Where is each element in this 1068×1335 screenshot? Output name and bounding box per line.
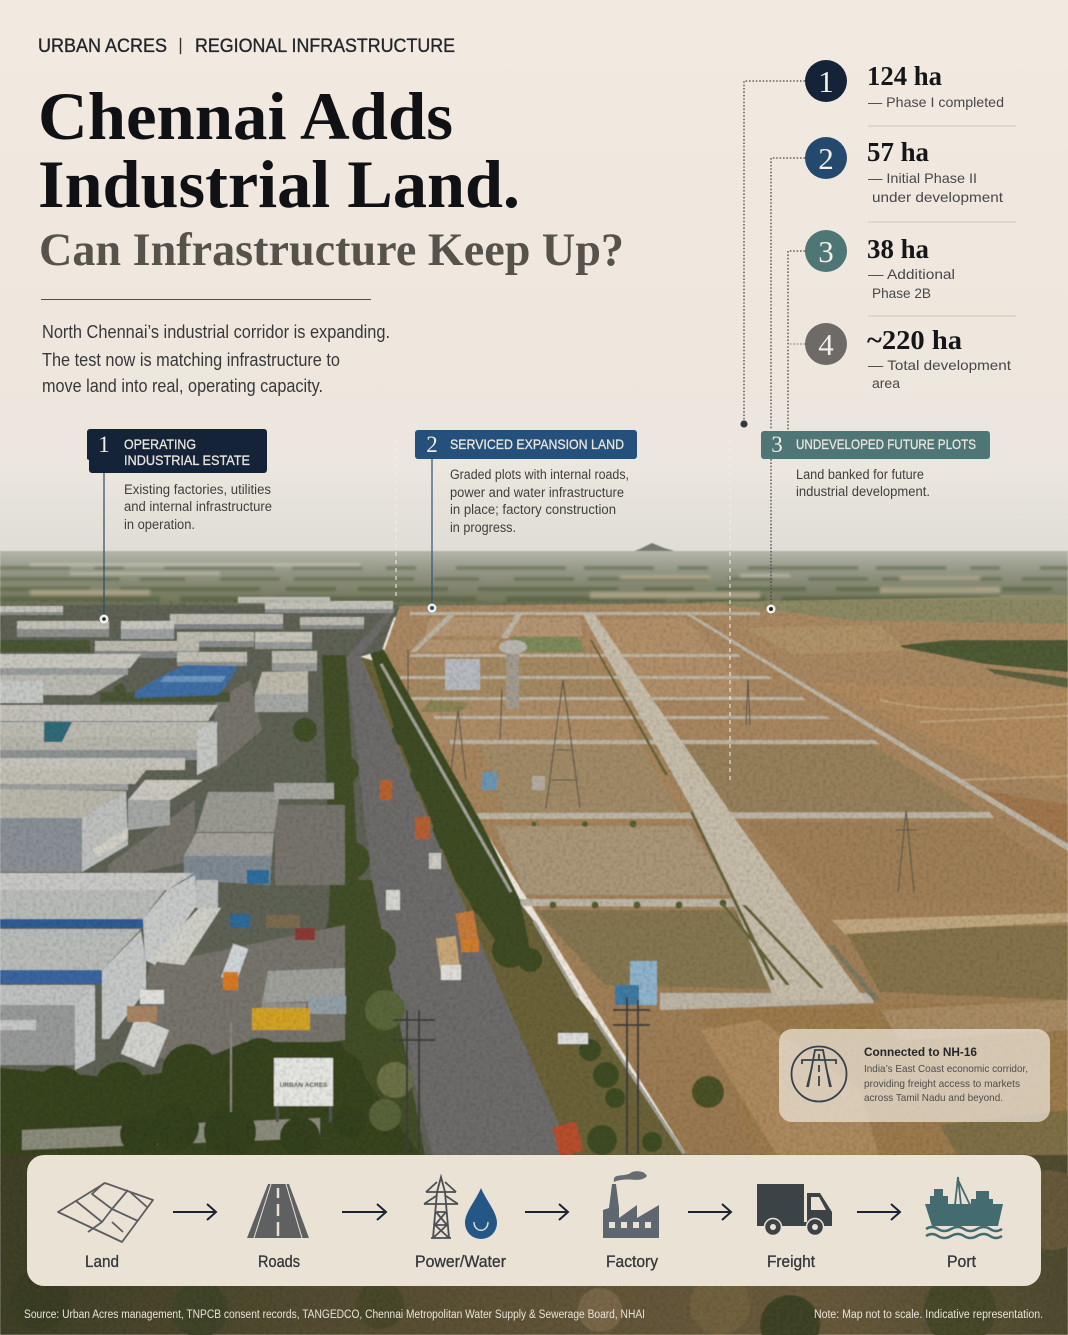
icon: highway [792, 1046, 846, 1102]
icon: cargo ship [925, 1177, 1003, 1238]
water tower [499, 640, 527, 709]
title [38, 78, 520, 222]
intro paragraph: move land into real, operating capacity. [42, 376, 323, 396]
boundary wall [22, 1118, 320, 1150]
upper right warehouse [255, 671, 308, 712]
graded plots [410, 618, 1068, 990]
stat: 57 ha [805, 137, 1003, 205]
description: and internal infrastructure [124, 499, 272, 514]
description: Land banked for future [796, 467, 924, 482]
description [868, 170, 1003, 205]
trucks and vehicles [121, 780, 588, 1156]
long warehouse rows [0, 705, 218, 830]
card text [864, 1063, 1028, 1104]
access road [346, 607, 572, 1155]
saplings along plot roads [532, 820, 726, 908]
description [124, 482, 272, 532]
description [868, 266, 955, 301]
divider [868, 222, 1016, 223]
badge [87, 429, 267, 473]
card [779, 1029, 1050, 1122]
card text: across Tamil Nadu and beyond. [864, 1092, 1003, 1104]
icon: truck [757, 1184, 832, 1236]
pylons [408, 650, 917, 892]
perimeter wall [381, 664, 684, 1154]
title: Chennai Adds [38, 78, 453, 154]
small service huts [482, 772, 657, 1005]
roadside trees [293, 655, 425, 1155]
description [796, 467, 930, 499]
plot access roads [400, 612, 1068, 1010]
number circle [805, 323, 847, 365]
card text: India’s East Coast economic corridor, [864, 1063, 1028, 1075]
blue roofed shed [135, 665, 238, 698]
centre warehouse [184, 783, 334, 885]
number circle [805, 137, 847, 179]
label: Freight: Freight [767, 1253, 815, 1271]
map marker [766, 604, 776, 614]
tree line beside fence [366, 608, 724, 1155]
circle numeral: 3 [818, 234, 834, 269]
description [868, 357, 1011, 391]
brand kicker: URBAN ACRES [38, 35, 167, 57]
photographic texture [0, 600, 1068, 1335]
map marker [100, 614, 108, 624]
circle numeral: 1 [818, 64, 834, 99]
arrow [342, 1204, 386, 1220]
arrow [688, 1204, 731, 1220]
section kicker: REGIONAL INFRASTRUCTURE [195, 35, 455, 57]
badge text: SERVICED EXPANSION LAND [450, 436, 624, 452]
description: Phase 2B [872, 285, 931, 301]
median planting [590, 640, 880, 1000]
description: under development [872, 189, 1003, 205]
icon: power pylon [424, 1177, 458, 1238]
arrow [173, 1204, 216, 1220]
foreground warehouse two [0, 929, 146, 1039]
badge number: 1 [98, 432, 110, 457]
callout: undeveloped future plots [761, 431, 990, 614]
small white building [0, 681, 43, 703]
intro paragraph [42, 322, 390, 396]
foreground warehouse one [0, 873, 221, 965]
billboard: URBAN ACRES [280, 1082, 328, 1089]
badge text: OPERATING [124, 436, 196, 452]
label: Factory: Factory [606, 1253, 659, 1271]
billboard [274, 1058, 333, 1122]
separator [180, 38, 181, 54]
number circle [805, 60, 847, 102]
callout: connected to NH-16 [779, 1029, 1050, 1122]
icon: factory [603, 1171, 659, 1238]
main concrete spine road [583, 615, 866, 1001]
badge text: UNDEVELOPED FUTURE PLOTS [796, 436, 976, 452]
dashed zone dividers [396, 440, 730, 780]
icon: road [247, 1184, 309, 1238]
estate base ground [0, 605, 440, 1155]
card heading: Connected to NH-16 [864, 1045, 977, 1059]
arrow [857, 1204, 900, 1220]
panel background [27, 1155, 1041, 1286]
description: — Additional [868, 266, 955, 282]
badge text [124, 436, 250, 468]
horizon fields and tree bands [0, 563, 1068, 600]
stat: 38 ha [805, 230, 955, 301]
badge number: 3 [771, 432, 783, 457]
callout: operating industrial estate [87, 429, 272, 624]
value: 57 ha [867, 137, 929, 167]
panel: land to port value chain [27, 1155, 1041, 1286]
value: ~220 ha [867, 325, 963, 355]
lower foreground scrub [0, 1155, 1068, 1335]
label: Power/Water: Power/Water [415, 1253, 506, 1271]
value: 124 ha [867, 61, 942, 91]
badge [415, 430, 637, 459]
yards [108, 680, 345, 1060]
distant hill [620, 543, 692, 556]
aerial photograph of the industrial corridor [0, 543, 1068, 1335]
serviced and undeveloped land [380, 600, 1068, 1160]
description: industrial development. [796, 484, 930, 499]
tree clumps between far warehouses [0, 640, 230, 702]
connector end dot [740, 420, 748, 428]
mid left warehouse [0, 789, 128, 872]
label: Land: Land [85, 1253, 119, 1271]
description: — Total development [868, 357, 1011, 373]
icon: water drop [465, 1188, 497, 1239]
sky background [0, 0, 1068, 552]
hazy horizon band [0, 551, 1068, 617]
description: Existing factories, utilities [124, 482, 271, 497]
label: Port: Port [947, 1253, 976, 1271]
stat: 124 ha [805, 60, 1004, 110]
description: — Initial Phase II [868, 170, 977, 186]
header line [38, 35, 455, 57]
description: in place; factory construction [450, 502, 616, 517]
utility poles [231, 997, 650, 1154]
stat: ~220 ha [805, 323, 1011, 391]
description: Graded plots with internal roads, [450, 467, 629, 482]
badge text: INDUSTRIAL ESTATE [124, 452, 250, 468]
roadside verge between road and fence [361, 657, 690, 1160]
icon: land parcels [58, 1183, 153, 1242]
foreground warehouse three [0, 985, 95, 1070]
number circle [805, 230, 847, 272]
circle numeral: 4 [818, 327, 834, 362]
callout: serviced expansion land [415, 430, 637, 612]
far warehouses [0, 597, 393, 695]
badge [761, 431, 990, 459]
intro paragraph: North Chennai’s industrial corridor is expanding. [42, 322, 390, 342]
badge number: 2 [426, 432, 438, 457]
stat connector lines [744, 81, 805, 604]
leader line [103, 473, 105, 616]
title: Industrial Land. [38, 146, 520, 222]
card text: providing freight access to markets [864, 1078, 1020, 1090]
label: Roads: Roads [258, 1253, 300, 1271]
divider [868, 126, 1016, 127]
map disclaimer: Note: Map not to scale. Indicative representation. [814, 1309, 1043, 1321]
map marker [428, 604, 436, 612]
value: 38 ha [867, 234, 929, 264]
source note: Source: Urban Acres management, TNPCB consent records, TANGEDCO, Chennai Metropolitan Water Supply & Sewerage Board, NHAI [24, 1309, 645, 1321]
arrow [525, 1204, 568, 1220]
divider [868, 316, 1016, 317]
leader line [431, 458, 433, 604]
circle numeral: 2 [818, 141, 834, 176]
description: area [872, 375, 900, 391]
subtitle: Can Infrastructure Keep Up? [39, 224, 624, 276]
description [450, 467, 629, 535]
description: in operation. [124, 517, 195, 532]
description: in progress. [450, 520, 516, 535]
far right scrub [700, 596, 1068, 1160]
description: — Phase I completed [868, 94, 1004, 110]
foreground trees [0, 1038, 420, 1155]
intro rule [41, 299, 371, 300]
description: power and water infrastructure [450, 485, 624, 500]
small yard sheds [262, 968, 346, 1014]
intro paragraph: The test now is matching infrastructure to [42, 350, 340, 370]
site office [445, 659, 480, 690]
